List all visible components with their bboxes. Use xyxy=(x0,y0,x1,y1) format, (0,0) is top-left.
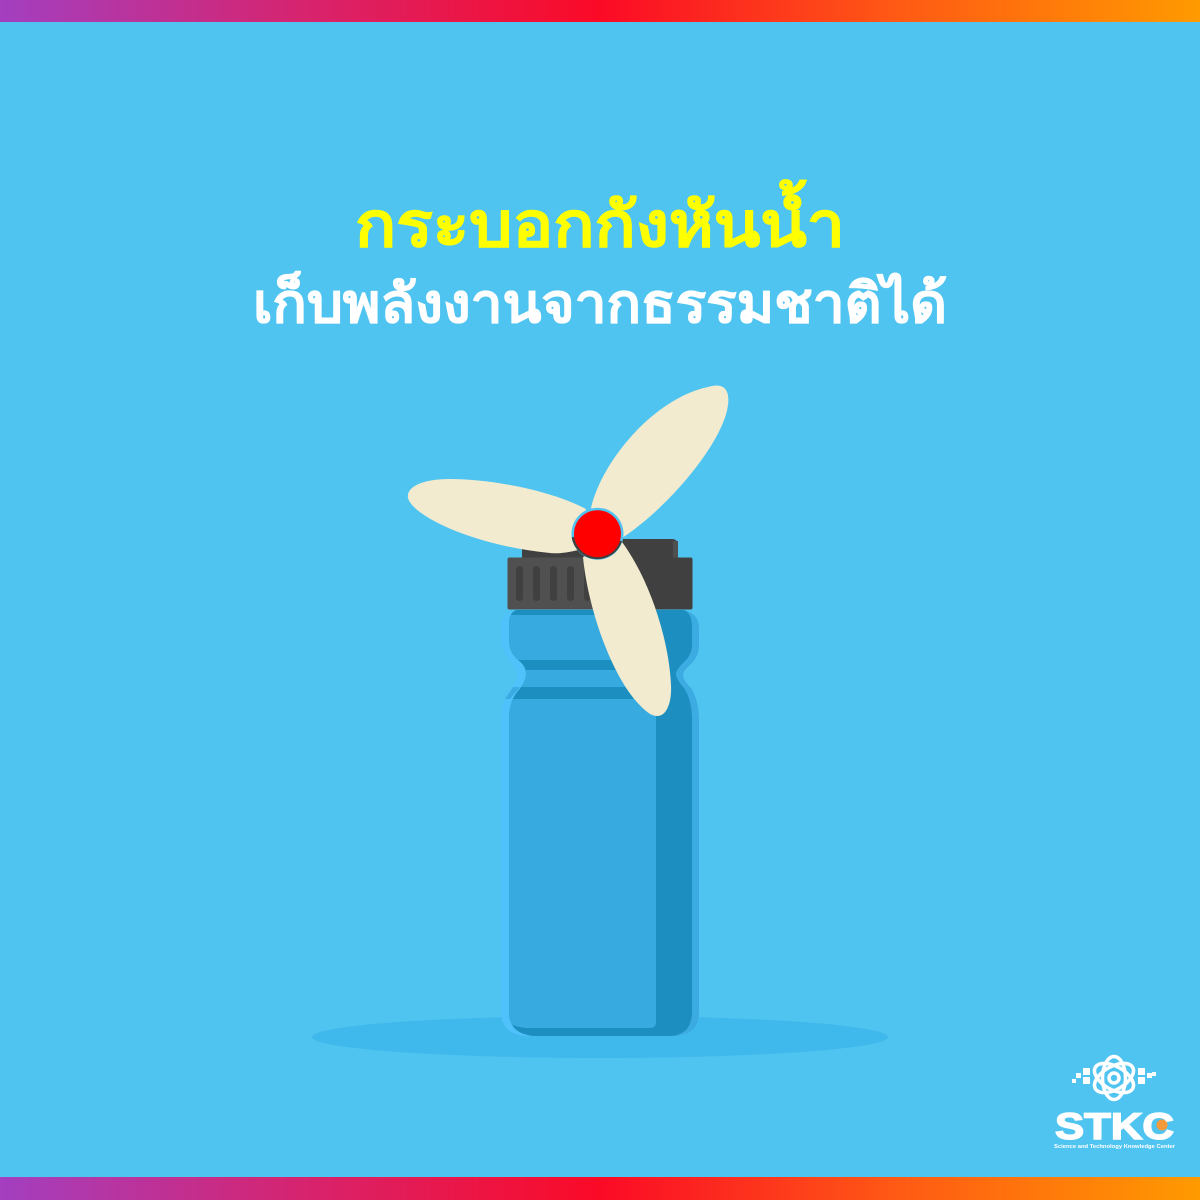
water bottle xyxy=(500,605,700,1040)
title line 1: กระบอกกังหันน้ำ xyxy=(355,179,845,260)
hub ring xyxy=(572,508,624,560)
bottom gradient bar xyxy=(0,1177,1200,1200)
logo dot xyxy=(1156,1120,1168,1130)
bottle rim right xyxy=(600,610,699,1036)
blade: upper right xyxy=(591,386,728,538)
body highlight, lower xyxy=(500,699,656,1028)
body highlight, neck xyxy=(509,615,611,660)
bottle body xyxy=(509,610,692,1036)
bottle rim left xyxy=(501,610,600,1036)
top gradient bar xyxy=(0,0,1200,22)
lower band rim xyxy=(505,687,520,699)
pinwheel xyxy=(408,386,728,716)
bottle cap xyxy=(508,539,692,610)
hub xyxy=(574,510,621,557)
hub shadow xyxy=(572,530,622,559)
blade: bottom xyxy=(583,542,671,716)
cap top xyxy=(522,539,678,558)
ground shadow xyxy=(312,1016,888,1058)
icon: atom xyxy=(1090,1056,1138,1100)
title line 2: เก็บพลังงานจากธรรมชาติได้ xyxy=(253,272,947,334)
logo tagline: Science and Technology Knowledge Center xyxy=(1054,1144,1176,1150)
blade: left xyxy=(408,479,586,553)
logo: STKC xyxy=(1054,1056,1176,1150)
title xyxy=(253,179,947,334)
cap band xyxy=(508,558,692,610)
logo wordmark: STKC xyxy=(1055,1106,1174,1147)
logo pixels xyxy=(1072,1068,1156,1084)
cap ridges xyxy=(516,566,591,601)
